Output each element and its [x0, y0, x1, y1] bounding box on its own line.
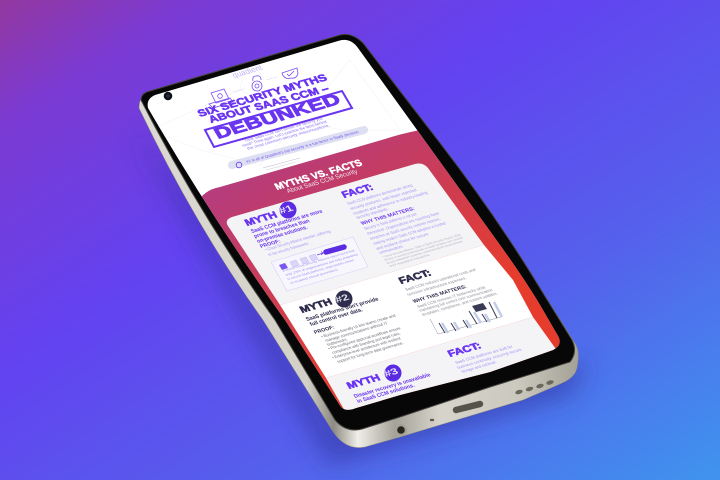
title: SIX SECURITY MYTHS [196, 73, 330, 120]
myth 1 why this matters: Security in SaaS platforms is not just [363, 211, 418, 231]
arrow [317, 252, 323, 255]
intro text: the most common security misconceptions. [246, 123, 331, 151]
speaker holes [515, 379, 554, 395]
myth 1 footnotes: Survey of security professionals on SaaS adoption and controls [383, 235, 464, 262]
box text: in trusted cloud providers. [289, 267, 340, 285]
button [326, 247, 344, 252]
myth 1 statement: on-premise solutions. [256, 225, 310, 245]
myth 1 heading [242, 202, 296, 228]
bar chart [430, 302, 502, 334]
myth 2 why this matters: SaaS CCM removes IT bottlenecks while [416, 284, 487, 309]
myth 2 fact: removes infrastructure expenses. [406, 275, 468, 297]
usb port [456, 404, 480, 410]
myth 3 statement: Disaster recovery is unavailable [353, 372, 432, 400]
icon: shield [282, 68, 298, 78]
myth 1 fact: security postures, with fewer reported [349, 187, 418, 211]
myth 2 proof: • Business-friendly UI lets teams create and [320, 313, 397, 339]
callout pill: #1 in all of Quadient's top security is a top factor in SaaS decision [245, 130, 360, 164]
myth 3 heading: #3 [382, 366, 400, 379]
box text [281, 248, 359, 285]
myth 2 fact: SaaS CCM reduces operational costs and [404, 267, 477, 292]
myth 3 fact: business continuity, ensuring secure [456, 347, 523, 370]
myth 1 heading: #1 [277, 203, 295, 216]
certification badges [279, 254, 318, 270]
myth 1 fact: SaaS CCM platforms demonstrate strong [346, 183, 414, 206]
myth 2 why this matters: templates, compliance, and content updates. [421, 291, 499, 317]
myth 3 fact [446, 342, 522, 373]
dashed connectors [233, 77, 277, 92]
myth 1 why this matters: communications. [378, 243, 405, 255]
title [196, 73, 352, 147]
myth 1 why this matters: WHY THIS MATTERS: [360, 206, 416, 227]
myth 2 proof: bottlenecks. [326, 337, 349, 347]
myth 1 footnotes: and regulated industries [388, 252, 432, 268]
myth 2 statement: SaaS platforms don't provide [305, 296, 380, 323]
myth 2 proof: • Enterprise-level architecture with resilient [331, 335, 402, 360]
icon: computer [209, 89, 233, 108]
intro text: need? Think again. Let's examine the facts behind [241, 119, 328, 148]
logo: quadient [230, 63, 265, 80]
panel: myth 1 card [227, 164, 484, 305]
myth 1 statement: prone to breaches than [253, 218, 311, 240]
icon: camera [164, 92, 172, 100]
title: DEBUNKED [211, 91, 344, 143]
myth 2 proof: PROOF: [313, 324, 336, 336]
chart badge icon [472, 303, 487, 312]
myth 2 why this matters: WHY THIS MATTERS: [412, 284, 468, 305]
panel: myth 2 card [280, 245, 533, 378]
myth 3 fact: SaaS CCM platforms are built for [454, 344, 514, 365]
myth 3 statement: in SaaS CCM solutions. [356, 383, 417, 405]
phone body [139, 34, 578, 448]
box text: A recent Cloud Security Alliance report found that [281, 248, 356, 273]
myth 2 proof: support for long-term data governance. [336, 340, 405, 364]
myth 3 fact: storage and retrieval. [460, 359, 498, 374]
crimson band [202, 130, 560, 410]
box text: only 23% of organizations are fully prepared [284, 252, 359, 277]
box text: to secure SaaS platforms, while leaders invest [286, 258, 355, 281]
headphone jack [395, 424, 407, 436]
myth 2 why this matters [412, 284, 499, 317]
panel: myth 3 card [326, 317, 556, 410]
myth 2 heading: MYTH [297, 296, 334, 315]
phone bezel [141, 34, 575, 430]
phone shadow [135, 130, 590, 465]
myth 2 heading [297, 290, 352, 315]
myth 1 fact: FACT: [339, 181, 375, 200]
myth 2 proof: manage communications without IT [324, 320, 389, 343]
myth 1 proof: PROOF: [259, 238, 282, 250]
debunked box [205, 91, 352, 147]
myth 1 footnotes: across enterprise customer communications environments [385, 239, 464, 265]
myth 1 fact [340, 184, 428, 219]
myth 3 heading [344, 364, 402, 391]
myth 2 fact [396, 267, 477, 297]
intro text: Think SaaS CCM can't deliver the security you [243, 116, 324, 143]
myth 2 proof: compliance with branding and legal rules. [331, 331, 402, 355]
myth 2 why this matters: maintaining full control over communication [418, 287, 494, 313]
myth 2 fact: FACT: [396, 267, 433, 286]
band heading: About SaaS CCM Security [285, 168, 360, 195]
myth 1 why this matters: breaches as SaaS security controls improve, [369, 216, 442, 241]
myth 2 proof [313, 313, 405, 364]
myth 1 heading: MYTH [242, 209, 279, 228]
phone screen [148, 40, 560, 410]
myth 1 footnotes: * Cloud Security Alliance, State of SaaS Security Report, 2024 [381, 233, 462, 259]
band heading: MYTHS VS. FACTS [272, 157, 364, 192]
myth 1 why this matters: theoretical. Organizations are reporting fewer [366, 210, 441, 236]
myth 3 fact: FACT: [445, 340, 483, 359]
myth 1 proof: • Cloud Security Alliance member, adhering [264, 229, 332, 252]
myth 3 heading: MYTH [344, 371, 382, 391]
myth 1 fact: incidents and adherence to industry-leading [352, 190, 429, 216]
myth 1 fact: security standards. [355, 206, 390, 220]
myth 1 footnotes [381, 233, 464, 268]
icon: lock [252, 76, 262, 91]
microphone hole [430, 419, 434, 421]
myth 1 why this matters: and resilient choice for secure [375, 231, 430, 251]
myth 2 proof: • Pre-configured approval workflows ensure [327, 325, 402, 351]
myth 1 certification box [271, 237, 368, 291]
myth 3 proof: PROOF: [362, 402, 385, 414]
myth 1 statement: SaaS CCM platforms are more [250, 209, 324, 235]
myth 2 heading: #2 [333, 292, 351, 305]
myth 1 why this matters: making modern SaaS CCM adoption a trusted [372, 221, 447, 246]
myth 1 proof: to top security frameworks [267, 241, 310, 257]
myth 1 why this matters [360, 206, 447, 255]
title: ABOUT SAAS CCM – [207, 83, 332, 126]
callout pill [232, 130, 364, 170]
myth 2 statement: full control over data. [309, 307, 365, 328]
